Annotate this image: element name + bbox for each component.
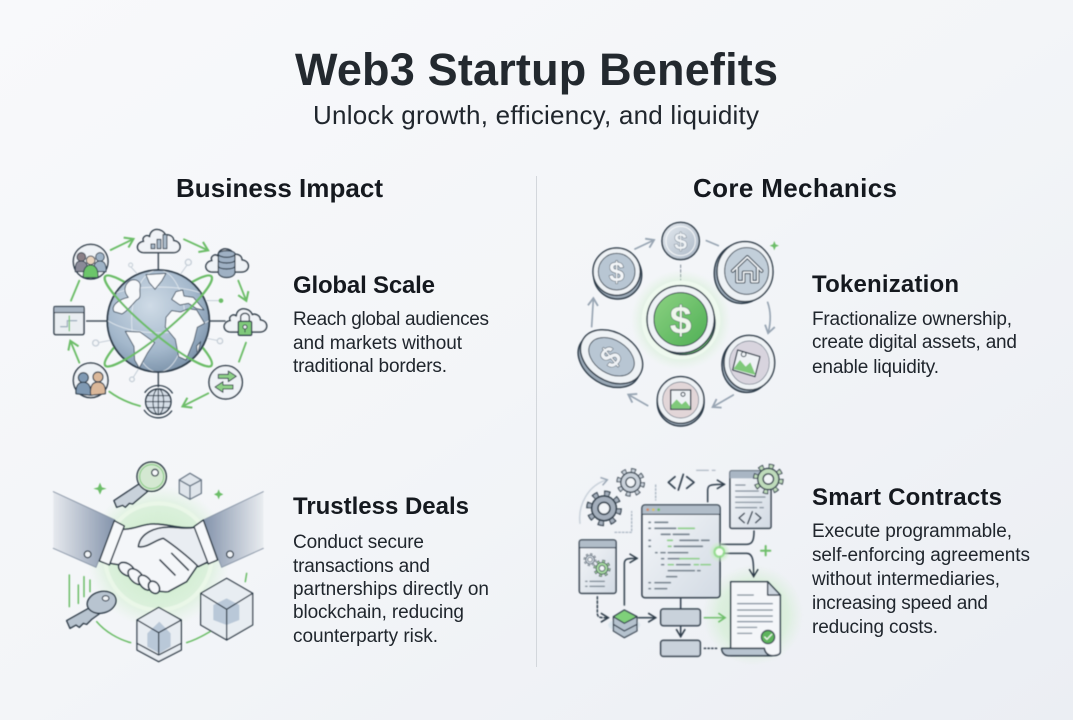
panel: Tokenization bbox=[568, 222, 1017, 426]
heading: Trustless Deals: Trustless Deals bbox=[293, 493, 469, 520]
signed contract document bbox=[722, 582, 780, 656]
green cycle arrows bbox=[71, 239, 246, 406]
code window bbox=[642, 505, 720, 598]
house coin bbox=[714, 242, 773, 303]
text: Trustless Deals description: Conduct secure bbox=[293, 532, 424, 553]
heading: Smart Contracts: Smart Contracts bbox=[812, 484, 1002, 511]
small app window bbox=[579, 540, 616, 593]
top coin: $ bbox=[674, 228, 687, 254]
text: Smart Contracts description: without intermediaries, bbox=[811, 569, 1000, 590]
icon: cloud chart bbox=[137, 229, 180, 253]
icon: team group bbox=[73, 244, 108, 279]
small cube bbox=[179, 473, 201, 499]
heading: Business Impact: Business Impact bbox=[176, 173, 383, 203]
heading: Tokenization: Tokenization bbox=[812, 271, 959, 298]
icon: exchange arrows bbox=[209, 366, 242, 399]
text: Trustless Deals description bbox=[293, 532, 489, 647]
heading: Core Mechanics: Core Mechanics bbox=[693, 173, 897, 203]
gears bbox=[580, 471, 656, 532]
subtitle: Unlock growth, efficiency, and liquidity bbox=[313, 100, 759, 130]
center green coin: $ bbox=[670, 299, 692, 343]
orbit rings back bbox=[98, 267, 219, 375]
icon: token coins bbox=[568, 222, 779, 426]
icon: token coins: $ bbox=[594, 340, 628, 375]
glowing node bbox=[709, 541, 730, 563]
bottom key bbox=[67, 588, 119, 628]
text: Smart Contracts description: self-enforcing agreements bbox=[812, 545, 1030, 566]
top coin bbox=[662, 222, 699, 260]
icon: handshake bbox=[53, 462, 263, 662]
heading: Global Scale: Global Scale bbox=[293, 272, 435, 299]
middle cube bbox=[137, 607, 181, 662]
icon: web globe bbox=[144, 386, 172, 418]
text: Global Scale description: and markets without bbox=[293, 333, 463, 354]
left sleeve bbox=[53, 492, 115, 567]
cuffs bbox=[99, 520, 218, 565]
center green coin bbox=[631, 270, 731, 370]
text: Trustless Deals description: transactions and bbox=[293, 556, 430, 577]
text: Smart Contracts description: reducing costs. bbox=[812, 617, 938, 638]
tilted dollar coin bbox=[568, 319, 653, 398]
text: Smart Contracts description: Execute programmable, bbox=[812, 521, 1012, 542]
connectors bbox=[597, 484, 754, 648]
top key bbox=[114, 462, 166, 507]
right sleeve bbox=[203, 492, 263, 567]
icon: browser window bbox=[54, 307, 84, 335]
text: Trustless Deals description: partnerships directly on bbox=[293, 579, 489, 600]
contract document top bbox=[730, 466, 781, 528]
icon: smart contract workflow bbox=[579, 466, 803, 665]
text: Global Scale description: Reach global audiences bbox=[293, 309, 489, 330]
code tag bbox=[668, 474, 694, 490]
large cube bbox=[201, 578, 253, 640]
text: Tokenization description: enable liquidity. bbox=[812, 357, 939, 378]
left dollar coin: $ bbox=[609, 257, 624, 288]
hexagon data node bbox=[608, 610, 640, 638]
icon: two people bbox=[73, 363, 108, 398]
text: Tokenization description: create digital assets, and bbox=[812, 332, 1017, 353]
icon: cloud lock bbox=[224, 309, 267, 335]
grey cycle arrows bbox=[592, 240, 770, 407]
title: Web3 Startup Benefits bbox=[295, 44, 778, 95]
text: Trustless Deals description: counterparty risk. bbox=[293, 626, 438, 647]
text: Smart Contracts description bbox=[811, 521, 1030, 638]
icon: cloud database bbox=[206, 249, 248, 277]
panel: Smart Contracts bbox=[579, 466, 1030, 665]
image coin right bbox=[722, 335, 775, 392]
text: Tokenization description bbox=[812, 309, 1017, 378]
image coin bottom bbox=[657, 377, 704, 426]
text: Tokenization description: Fractionalize ownership, bbox=[812, 309, 1012, 330]
text: Smart Contracts description: increasing speed and bbox=[812, 593, 988, 614]
panel: Trustless Deals bbox=[53, 462, 489, 662]
orbit rings front bbox=[98, 276, 219, 375]
globe bbox=[107, 270, 209, 372]
left dollar coin bbox=[593, 248, 642, 299]
text: Global Scale description: traditional borders. bbox=[293, 356, 447, 377]
panel: Global Scale bbox=[54, 229, 489, 418]
process boxes bbox=[661, 609, 700, 656]
clasped hands bbox=[110, 524, 210, 596]
text: Trustless Deals description: blockchain, reducing bbox=[293, 602, 464, 623]
icon: global network bbox=[54, 229, 267, 418]
text: Global Scale description bbox=[293, 309, 489, 377]
